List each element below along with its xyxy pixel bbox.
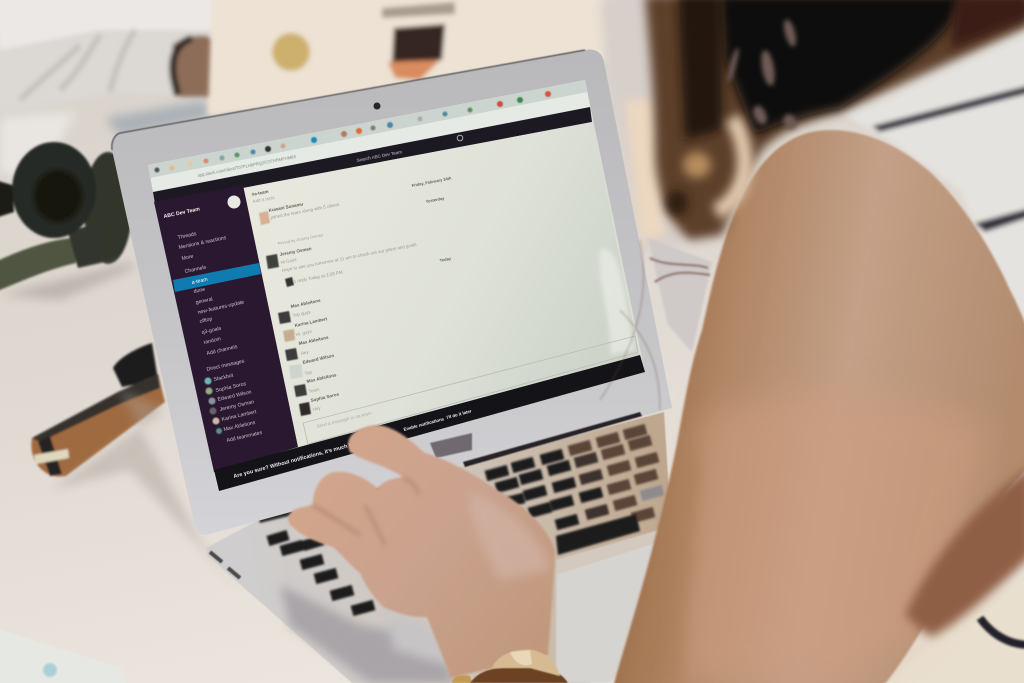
hinge shadow (463, 412, 642, 467)
sidebar text: Direct messages (206, 358, 245, 373)
sidebar text: general (195, 296, 213, 306)
sidebar workspace add button (228, 196, 240, 208)
notification text: Are you sure? Without notifications, it's much harder (233, 439, 367, 480)
messages: Pinned by Jeremy Osman (277, 232, 323, 246)
sidebar text: Sophia Soros (215, 381, 247, 394)
browser chrome (148, 80, 590, 192)
messages: Yesterday (425, 195, 446, 204)
golden curl (683, 152, 711, 178)
sidebar text: Mentions & reactions (178, 235, 227, 251)
message avatars (259, 211, 311, 416)
reflection patch on lid bezel (430, 433, 472, 458)
black keys (268, 454, 602, 611)
mid-brown dark keys (575, 457, 608, 515)
woman's dress, cream lower back (870, 570, 1024, 683)
light flecks in hair (725, 18, 799, 132)
shadow of laptop and objects on table (50, 390, 240, 590)
messages: Hey (300, 349, 310, 356)
messages: Top (304, 369, 313, 376)
wristwatch (452, 650, 568, 683)
workspace name: ABC Dev Team (163, 206, 201, 220)
hand on the keyboard (288, 425, 555, 678)
notification text (233, 408, 472, 480)
messages: Max Ableitons (290, 298, 321, 309)
sidebar text: new-features-update (197, 299, 245, 316)
light key (641, 490, 663, 496)
notification bar (214, 355, 645, 491)
sidebar text: a-team (191, 277, 208, 286)
messages: 1 reply Today at 2:28 PM (293, 270, 343, 284)
sidebar text: Jeremy Osman (219, 399, 255, 413)
warmer lower skin tone (680, 391, 990, 683)
sidebar text: Add channels (206, 344, 238, 357)
screen glass (148, 80, 645, 491)
sidebar avatars (204, 378, 222, 434)
screen (148, 80, 645, 491)
notification text: Enable notifications (403, 416, 445, 432)
sidebar text: q3-goals (201, 326, 222, 336)
sidebar text: Edward Wilson (217, 389, 252, 403)
space bar (556, 514, 640, 555)
messages: joined the team along with 5 others. (269, 202, 341, 220)
messages: Add a topic (252, 195, 276, 204)
woman's bare shoulder and arm (612, 130, 1024, 683)
header help icon (457, 135, 463, 141)
sidebar text: More (181, 254, 194, 262)
messages: Team (308, 387, 320, 394)
messages: Max Ableitons (298, 335, 329, 346)
messages: Friday, February 24th (411, 175, 452, 188)
messages: Edward Wilson (302, 353, 335, 365)
messages: Jeremy Osman (279, 246, 312, 257)
headphones (0, 142, 132, 292)
darkest hair (720, 0, 965, 135)
trackpad (280, 585, 455, 683)
hair strands reflected over the laptop (600, 240, 660, 410)
highlight on back of the hand (470, 490, 550, 580)
browser tabs row of coloured favicons (154, 91, 551, 172)
messages: Hi, guys (295, 329, 313, 337)
sidebar (154, 185, 298, 472)
laptop side ports (210, 552, 240, 578)
sidebar text: dune (193, 287, 206, 295)
messages: Sophia Soros (310, 391, 340, 403)
sidebar text: Max Ableitons (223, 420, 256, 433)
messages: #a-team (251, 189, 269, 197)
background: second laptop with stickers (208, 0, 612, 115)
woman's striped top on shoulder (840, 28, 1024, 340)
paper at the bottom left (0, 628, 130, 683)
hair wedge with strands below the curls (648, 238, 712, 352)
browser address bar: app.slack.com/client/T07FLH8PRQ2/C07HRMFHM8S (197, 154, 297, 178)
webcam (374, 102, 380, 110)
sidebar text: Channels (184, 264, 207, 275)
notification text: I'll do it later (446, 408, 472, 420)
messages (251, 175, 452, 429)
knife with wooden handle (31, 343, 165, 477)
background: blurred tablet and papers on the table (0, 100, 210, 180)
finger shading (312, 477, 418, 545)
dark curl shadow (666, 190, 688, 216)
messages: Hi Guys (280, 257, 298, 265)
pale curl highlight (716, 118, 745, 212)
messages: Send a message to #a-team (316, 410, 372, 429)
woman's hair (645, 0, 1024, 240)
dark app header (153, 107, 592, 204)
keyboard keys (258, 429, 663, 611)
messages: Top guys (292, 309, 312, 318)
arm left shading (625, 440, 700, 683)
messages: Hey (312, 405, 322, 412)
messages: Today (439, 256, 452, 263)
laptop lid (112, 50, 672, 535)
function row strip (258, 508, 293, 523)
sidebar text: Add teammates (226, 430, 263, 444)
sidebar text: random (203, 336, 222, 346)
active channel highlight (173, 263, 261, 292)
sidebar text: offtop (199, 316, 213, 325)
messages: Hope to see you tomorrow at 11 am to check out our plans and goals (281, 242, 418, 273)
screen reflection (600, 249, 635, 355)
palm rest (556, 540, 660, 683)
sidebar text (163, 206, 263, 444)
reflected brown keys (569, 429, 658, 518)
sidebar text: Karina Lambert (221, 409, 258, 423)
messages: Karina Lambert (294, 316, 328, 328)
lid edge highlight and dark top edge (112, 50, 585, 150)
brown hair mass (645, 0, 1024, 240)
sidebar text: Threads (177, 231, 197, 241)
dress stripes lower right (980, 618, 1024, 645)
message composer box (303, 336, 638, 444)
messages: Max Ableitons (306, 372, 337, 384)
arm shadow (905, 465, 1024, 637)
sidebar text: Slackbot (213, 373, 234, 383)
messages: Kuwani Sunamu (268, 201, 304, 213)
browser tab row (148, 80, 587, 178)
header search label: Search ABC Dev Team (356, 149, 403, 163)
laptop base (206, 412, 672, 683)
background: bright area behind the hair (600, 0, 680, 250)
background: person's white shirt sleeve (0, 0, 215, 112)
main message pane (243, 122, 640, 447)
laptop (112, 50, 672, 683)
